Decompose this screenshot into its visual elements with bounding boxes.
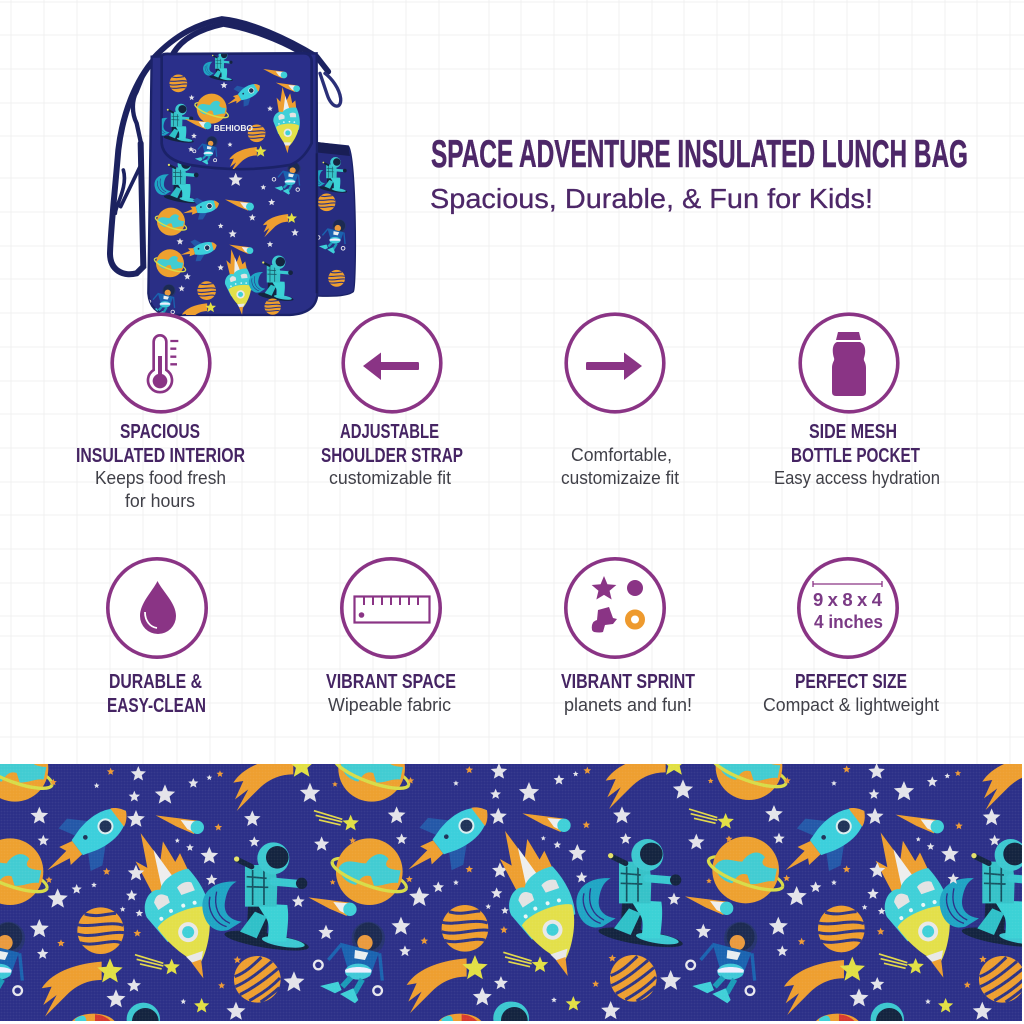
heading (791, 421, 920, 467)
bottom helmets and planets (71, 1002, 527, 1024)
description (95, 468, 226, 511)
comets (156, 815, 357, 916)
heading: INSULATED INTERIOR (76, 445, 245, 467)
heading (321, 421, 463, 467)
front zipper (314, 153, 320, 293)
top flap with logo (155, 51, 312, 172)
bottom helmets and planets (498, 1002, 904, 1021)
astronaut kids (0, 922, 385, 1003)
feature: comfortable fit (561, 314, 679, 488)
icon: thermometer (112, 314, 210, 412)
striped planets (77, 905, 488, 1003)
fabric right half (498, 764, 1022, 1021)
striped planets (610, 906, 1024, 1003)
feature: vibrant space (326, 559, 456, 715)
heading (107, 671, 206, 717)
heading: BOTTLE POCKET (791, 445, 920, 467)
heading: SPACIOUS (120, 421, 200, 443)
icon: bottle (800, 314, 898, 412)
description: planets and fun! (564, 695, 692, 715)
side mesh bottle pocket (318, 142, 356, 297)
heading: VIBRANT SPRINT (561, 671, 695, 693)
icon: ruler (342, 559, 440, 657)
small rockets (30, 787, 505, 894)
icon: dimensions: 9 x 8 x 4 (813, 589, 883, 610)
description: Keeps food fresh (95, 468, 226, 488)
panel: space fabric pattern (0, 764, 1022, 1021)
fabric left half (0, 735, 527, 1024)
icon: right arrow (566, 314, 664, 412)
big rocket (136, 833, 210, 978)
description: Comfortable, (571, 445, 672, 465)
heading (76, 421, 245, 467)
feature: adjustable shoulder strap (321, 314, 463, 488)
bag logo: BEHIOBO (214, 124, 253, 133)
heading: EASY-CLEAN (107, 695, 206, 717)
heading: SIDE MESH (809, 421, 897, 443)
heading: PERFECT SIZE (795, 671, 907, 693)
feature: perfect size (763, 559, 939, 715)
icon: left arrow (343, 314, 441, 412)
subtitle: Spacious, Durable, & Fun for Kids! (430, 183, 873, 214)
description: for hours (125, 491, 195, 511)
small rocket (786, 808, 865, 871)
feature: side mesh bottle pocket (774, 314, 940, 488)
feature: spacious insulated interior (76, 314, 245, 511)
astronaut kid (686, 922, 757, 1003)
description: customizable fit (329, 468, 451, 488)
icon: water drop (108, 559, 206, 657)
astronauts on snowboards (576, 839, 1024, 951)
big rockets (484, 817, 971, 989)
bag body (147, 53, 317, 327)
heading: DURABLE & (109, 671, 202, 693)
icon: dimensions: 4 inches (814, 611, 883, 632)
ringed planets (0, 735, 409, 905)
description (561, 445, 679, 488)
feature: durable and easy-clean (107, 559, 206, 717)
orange stars (46, 766, 508, 989)
heading: VIBRANT SPACE (326, 671, 456, 693)
heading: SHOULDER STRAP (321, 445, 463, 467)
white stars (30, 763, 509, 1020)
shooting stars (503, 751, 1024, 1015)
description: customizaize fit (561, 468, 679, 488)
shooting stars (42, 753, 488, 1017)
icon: dimensions (799, 559, 897, 657)
product photo: space lunch bag (110, 19, 355, 327)
shoulder strap (110, 19, 341, 274)
description: Easy access hydration (774, 468, 940, 488)
description: Compact & lightweight (763, 695, 939, 715)
astronaut on snowboard (202, 842, 310, 955)
heading: ADJUSTABLE (340, 421, 439, 443)
orange stars (583, 765, 987, 988)
ringed planets (706, 764, 788, 904)
description: Wipeable fabric (328, 695, 451, 715)
feature: vibrant sprint (561, 559, 695, 715)
comets (522, 813, 944, 915)
icon: shapes (566, 559, 664, 657)
white stars (519, 763, 1000, 1020)
